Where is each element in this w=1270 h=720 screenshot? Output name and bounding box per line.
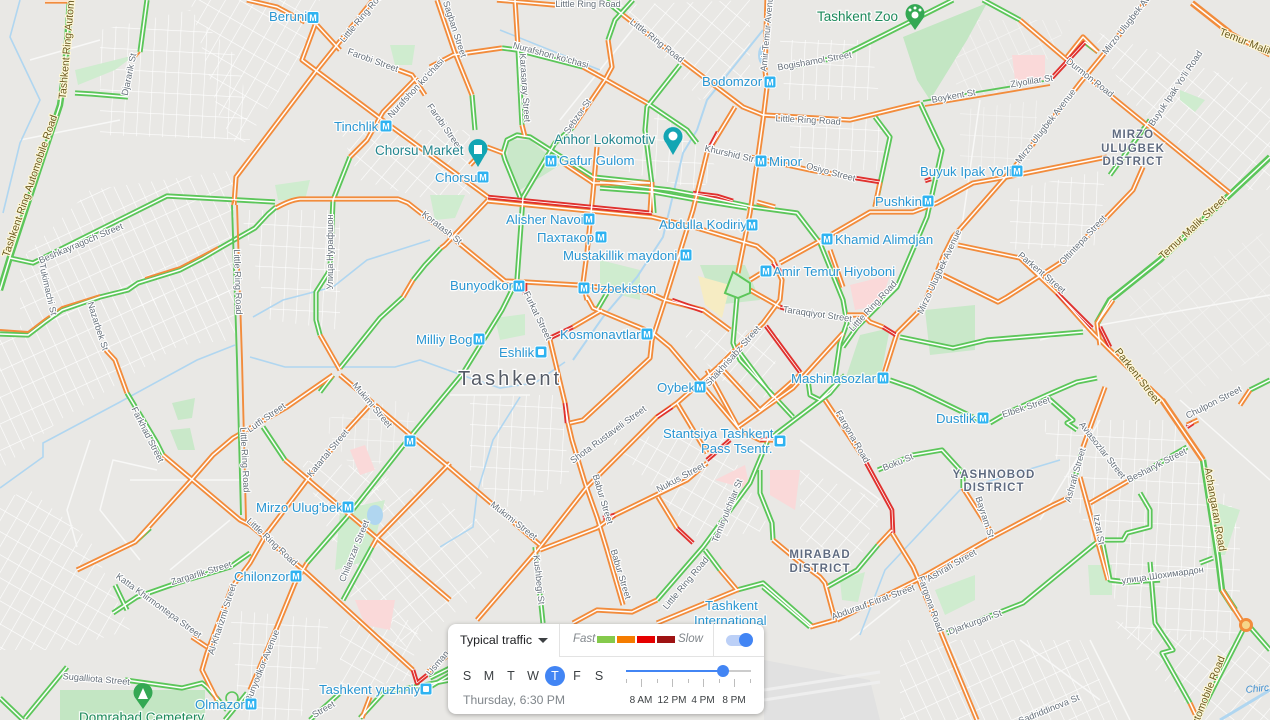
- street labels: Mirzo Ulugbek Avenue: [915, 228, 963, 315]
- street labels: Usman: [425, 649, 451, 677]
- street labels: Mukimi Street: [489, 499, 539, 542]
- highway labels: Tashkent Ring Automobile Road: [0, 113, 60, 259]
- street labels: Fargona Road: [916, 575, 946, 633]
- street labels: Al-Kharizmi Street: [206, 582, 238, 656]
- day selector: T: [551, 669, 559, 683]
- airport: [764, 660, 880, 720]
- station: Stantsiya Tashkent Pass Tsentr: Pass Tsentr.: [701, 441, 773, 456]
- street labels: Durmon Road: [1064, 56, 1115, 99]
- street labels: Shota Rustaveli Street: [568, 403, 649, 465]
- day selector: [463, 666, 603, 686]
- station: Пахтакор: Пахтакор: [537, 230, 594, 245]
- station: unnamed metro: [404, 435, 416, 447]
- station: Oybek: Oybek: [657, 380, 696, 395]
- street labels: Nurafshon ko'chasi: [386, 56, 446, 120]
- station: Minor: M: [757, 156, 765, 166]
- time slider: 12 PM: [658, 695, 686, 706]
- station: Olmazor: M: [247, 700, 255, 710]
- street labels: Sugalliota Street: [62, 671, 131, 687]
- district: Mirzo Ulugbek: MIRZO: [1112, 129, 1154, 141]
- airport label: Tashkent International: [694, 598, 767, 628]
- highway labels: Parkent Street: [1112, 346, 1163, 406]
- street labels: Babur Street: [609, 548, 633, 601]
- day selector: S: [463, 669, 471, 683]
- street labels: Bogishamol Street: [777, 50, 853, 72]
- street labels: Mukimi Street: [350, 380, 394, 430]
- street labels: Abdurauf Fitrat Street: [830, 582, 916, 622]
- district: Mirzo Ulugbek: DISTRICT: [1102, 156, 1164, 168]
- station: Gafur Gulom: Gafur Gulom: [559, 153, 635, 168]
- street labels: Boku St: [881, 451, 915, 473]
- street labels: Sagban Street: [441, 0, 469, 59]
- street labels: Khurshid Street: [704, 143, 768, 167]
- street labels: Djararik St: [120, 52, 139, 96]
- station: Buyuk Ipak Yo'li: Buyuk Ipak Yo'li: [920, 164, 1012, 179]
- street labels: Izzat St: [1091, 514, 1107, 546]
- station: Oybek: M: [696, 382, 704, 392]
- roundabouts: [226, 272, 1252, 704]
- station: Pushkin: M: [924, 196, 932, 206]
- street labels: Sebzor St: [562, 97, 593, 136]
- street labels: Street: [310, 699, 337, 720]
- station: Bunyodkor: Bunyodkor: [450, 278, 514, 293]
- station: Tashkent yuzhniy: Tashkent yuzhniy: [319, 682, 421, 697]
- street labels: Kushbegi St: [531, 555, 547, 605]
- street labels: Koratash St: [420, 209, 464, 247]
- station: Mirzo Ulug'bek: M: [344, 502, 352, 512]
- street labels: Besharyk Street: [1125, 446, 1188, 485]
- legend: Fast to Slow: Fast: [573, 633, 595, 645]
- highway labels: Tashkent Ring Autom: [57, 0, 77, 100]
- station: Stantsiya Tashkent Pass Tsentr: Stantsiya Tashkent: [663, 426, 774, 441]
- station: Mustakillik maydoni: Mustakillik maydoni: [563, 248, 677, 263]
- day selector: T: [507, 669, 515, 683]
- street labels: Boykent St: [931, 87, 977, 105]
- street labels: Taraqqiyot Street: [782, 304, 853, 324]
- station: Tinchlik: M: [382, 122, 390, 132]
- street labels: Tukimachi St: [37, 262, 59, 317]
- dropdown: Typical traffic: Typical traffic: [460, 633, 532, 647]
- street labels: Ashrafi Street: [925, 547, 978, 584]
- station: Milliy Bog: Milliy Bog: [416, 332, 472, 347]
- station: Mashinasozlar: M: [879, 374, 887, 384]
- street labels: Little Ring Road: [847, 279, 899, 333]
- legend: Fast to Slow: Slow: [678, 633, 703, 645]
- metro stations: [195, 9, 1023, 712]
- airport label: Tashkent International: Tashkent: [705, 598, 758, 613]
- street labels: Nukus Street: [655, 460, 707, 494]
- station: Beruni: M: [309, 13, 317, 23]
- highway labels: Temur Malik Street: [1157, 194, 1229, 262]
- legend: Fast to Slow: [573, 633, 704, 645]
- street labels: Oltintepa Street: [1057, 213, 1109, 267]
- street labels: Fargona Road: [834, 409, 872, 464]
- station: Mustakillik maydoni: M: [682, 250, 690, 260]
- station: Beruni: Beruni: [269, 9, 307, 24]
- station: Tinchlik: Tinchlik: [334, 119, 379, 134]
- district: Yashnobod: YASHNOBOD: [953, 469, 1035, 481]
- station: Dustlik: Dustlik: [936, 411, 976, 426]
- station: Uzbekiston: Uzbekiston: [591, 281, 656, 296]
- street labels: Parkent Street: [1016, 250, 1068, 296]
- street labels: Little Ring Road: [232, 249, 244, 315]
- station: Buyuk Ipak Yo'li: M: [1013, 166, 1021, 176]
- station: Minor: [755, 154, 803, 169]
- district: Mirabad: MIRABAD: [789, 549, 851, 561]
- street labels: Little Ring Road: [628, 17, 686, 65]
- time slider: 8 PM: [722, 695, 746, 706]
- place: Chorsu Market: Chorsu Market: [375, 143, 464, 158]
- time slider: 8 AM: [630, 695, 652, 706]
- street labels: Farobi Street: [346, 46, 400, 74]
- street labels: улица Шохимардон: [1121, 564, 1204, 586]
- day selector: W: [527, 669, 539, 683]
- day selector: S: [595, 669, 603, 683]
- selected time: Thursday, 6:30 PM: [463, 693, 565, 707]
- street labels: Zargarlik Street: [170, 559, 233, 587]
- street labels: Aviasozlar Street: [1077, 420, 1128, 481]
- station: Пахтакор: M: [597, 232, 605, 242]
- time slider: [626, 665, 751, 706]
- street labels: Babur Street: [591, 473, 615, 526]
- station: Gafur Gulom: M: [547, 156, 555, 166]
- divider lines: [559, 624, 560, 656]
- street labels: Osiyo Street: [805, 161, 857, 184]
- station: Kosmonavtlar: M: [643, 330, 651, 340]
- station: Bunyodkor: M: [515, 282, 523, 292]
- mixed lanes: [0, 52, 1050, 520]
- district: Mirabad: [789, 549, 851, 575]
- street labels: Bayram St: [973, 495, 996, 539]
- station: Milliy Bog: M: [475, 334, 483, 344]
- station: unnamed metro: M: [406, 436, 414, 446]
- station: Chilonzor: Chilonzor: [234, 569, 290, 584]
- station: Dustlik: M: [979, 414, 987, 424]
- street labels: Elbek Street: [1001, 395, 1052, 420]
- place: Tashkent Zoo: [817, 4, 925, 30]
- traffic roads: red (slow): [413, 42, 1193, 683]
- district: Yashnobod: DISTRICT: [963, 482, 1025, 494]
- street labels: Little Ring Road: [661, 555, 711, 611]
- street labels: Buyuk Ipak Yo'li Road: [1147, 49, 1204, 128]
- street labels: Furkat Street: [522, 290, 554, 342]
- street labels: Little Ring Road: [775, 113, 841, 127]
- day selector: M: [484, 669, 494, 683]
- station: Mashinasozlar: Mashinasozlar: [791, 371, 877, 386]
- toggle switch: [726, 633, 753, 647]
- street labels: Chulpon Street: [1184, 384, 1244, 421]
- place: Anhor Lokomotiv: [554, 127, 682, 155]
- street labels: Temiryulchilar St: [710, 477, 745, 544]
- station: Uzbekiston: M: [580, 284, 588, 294]
- district: Mirzo Ulugbek: ULUGBEK: [1101, 143, 1165, 155]
- street labels: Djarkurgan St: [947, 608, 1003, 636]
- street labels: Farobi Street: [425, 102, 464, 151]
- place: Domrabad Cemetery: [79, 683, 205, 720]
- station: Stantsiya Tashkent Pass Tsentr: [663, 426, 786, 456]
- time slider: 4 PM: [691, 695, 715, 706]
- station: Bodomzor: M: [766, 78, 774, 88]
- station: Khamid Alimdjan: Khamid Alimdjan: [835, 232, 933, 247]
- street labels: Katartal Street: [305, 427, 351, 479]
- station: Olmazor: Olmazor: [195, 697, 245, 712]
- station: Alisher Navoi: Alisher Navoi: [506, 212, 584, 227]
- station: Abdulla Kodiriy: Abdulla Kodiriy: [659, 217, 747, 232]
- district: Yashnobod: [953, 469, 1035, 494]
- station: Khamid Alimdjan: M: [823, 234, 831, 244]
- station: Eshlik: Eshlik: [499, 345, 535, 360]
- day selector: F: [573, 669, 581, 683]
- street labels: Lutfi Street: [245, 400, 288, 434]
- street labels: Katta Khirmontepa Street: [114, 571, 204, 640]
- place: Chorsu Market: [375, 139, 488, 167]
- station: Mirzo Ulug'bek: Mirzo Ulug'bek: [256, 500, 343, 515]
- station: Chorsu: Chorsu: [435, 170, 478, 185]
- street labels: Улица Нурафшон: [325, 214, 335, 290]
- street labels: Bunyodkor Avenue: [243, 628, 281, 703]
- station: Pushkin: Pushkin: [875, 194, 922, 209]
- district: Mirzo Ulugbek: [1101, 129, 1165, 168]
- city name: Tashkent: Tashkent: [458, 368, 562, 390]
- district: Mirabad: DISTRICT: [789, 563, 851, 575]
- street labels: Ashrafi Street: [1063, 447, 1088, 503]
- street labels: Beshkayragoch Street: [37, 221, 125, 266]
- street labels: Little Ring Road: [238, 427, 252, 493]
- station: Alisher Navoi: M: [585, 214, 593, 224]
- street labels: Nurafshon ko'chasi: [512, 40, 590, 70]
- street labels: Shakhrisabz Street: [703, 323, 763, 388]
- highway labels: Achangaran Road: [1202, 467, 1228, 552]
- street labels: Ziyolilar St: [1010, 73, 1054, 89]
- airport label: Tashkent International: International: [694, 613, 767, 628]
- place: Anhor Lokomotiv: Anhor Lokomotiv: [554, 132, 656, 147]
- place: Tashkent Zoo: Tashkent Zoo: [817, 9, 898, 24]
- street labels: Farkhad Street: [129, 405, 166, 464]
- street labels: Nazarbek St: [85, 300, 111, 352]
- station: Amir Temur Hiyoboni: M: [762, 266, 770, 276]
- river label: Chirc: [1245, 683, 1270, 696]
- station: Kosmonavtlar: Kosmonavtlar: [560, 327, 641, 342]
- street labels: Mirzo Ulugbek Avenue: [1013, 87, 1078, 165]
- station: Bodomzor: Bodomzor: [702, 74, 763, 89]
- street labels: Chilanzar Street: [337, 518, 371, 583]
- panel: typical traffic controls: [448, 624, 764, 714]
- street labels: Karasaray Street: [518, 53, 532, 123]
- station: Chorsu: M: [479, 172, 487, 182]
- station: Amir Temur Hiyoboni: Amir Temur Hiyoboni: [773, 264, 895, 279]
- street labels: Little Ring Road: [245, 516, 299, 568]
- station: Chilonzor: M: [292, 572, 300, 582]
- station: Abdulla Kodiriy: M: [748, 220, 756, 230]
- station: Minor: Minor: [769, 154, 803, 169]
